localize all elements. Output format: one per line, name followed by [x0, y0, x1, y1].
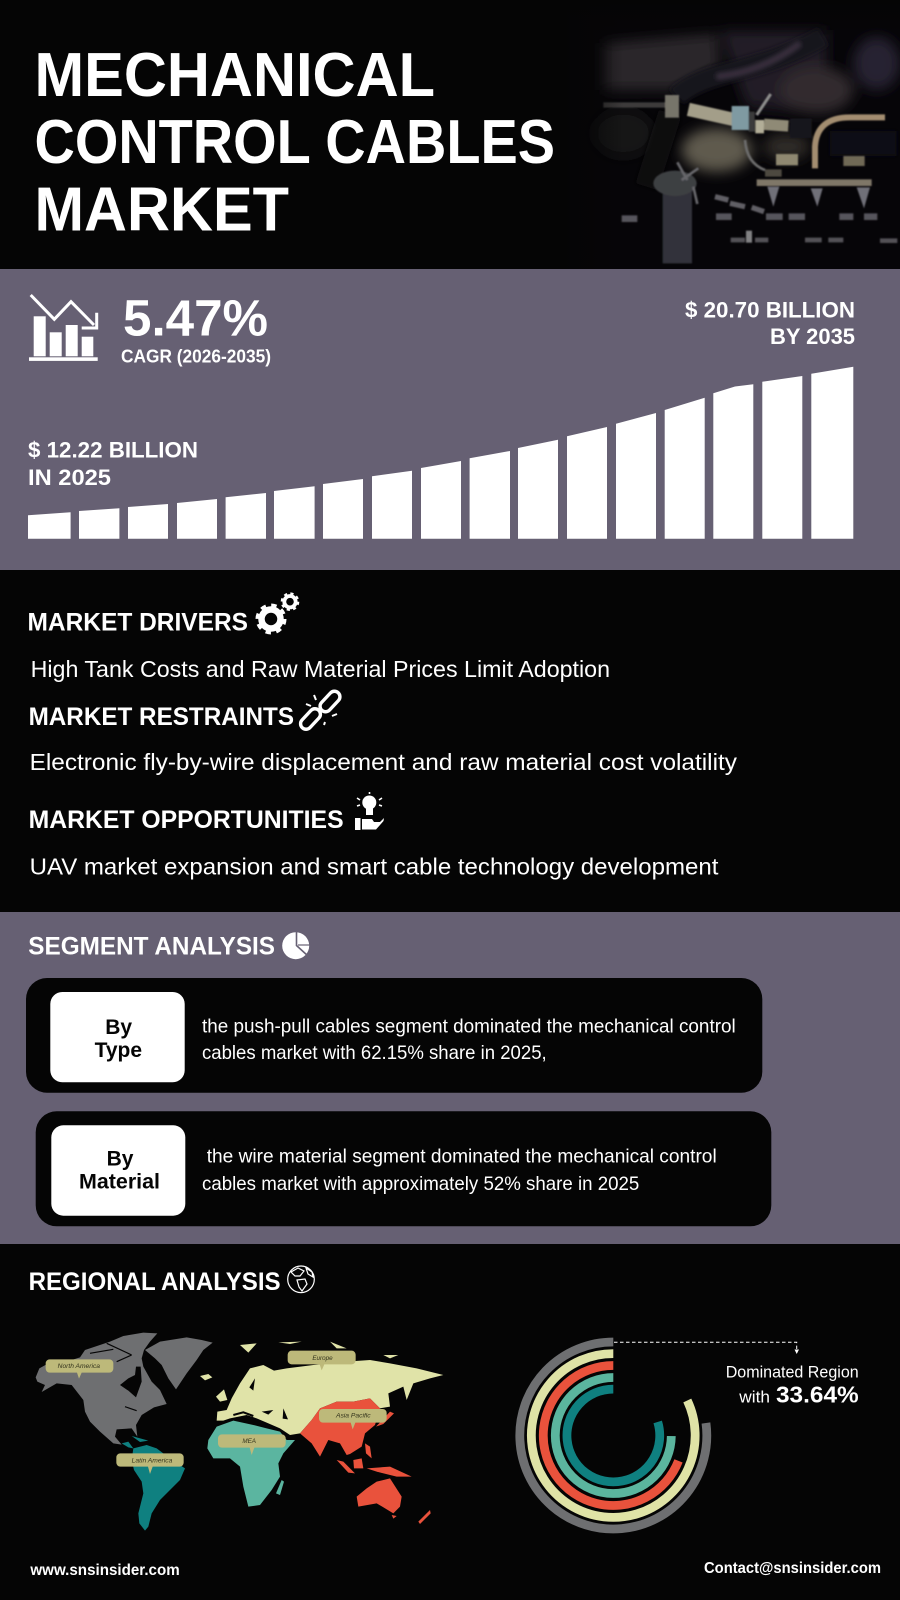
callout: dominated region	[726, 1363, 859, 1408]
title: MECHANICAL	[34, 41, 435, 110]
icon: chart with arrow	[29, 295, 98, 361]
region: middle east and africa	[207, 1421, 295, 1507]
footer	[29, 1560, 881, 1579]
bar chart: growth 2025 to 2035	[28, 367, 853, 539]
label: by type: By	[105, 1016, 132, 1039]
radial bar chart	[520, 1342, 707, 1529]
start value label: $ 12.22 BILLION	[28, 437, 198, 462]
callout: asia pacific: Asia Pacific	[335, 1413, 371, 1420]
header photo: mechanical cable	[560, 0, 900, 269]
heading: segment analysis: SEGMENT ANALYSIS	[28, 932, 275, 960]
callout: dominated region: 33.64%	[776, 1382, 859, 1408]
title: MARKET	[34, 176, 289, 244]
text: by material description: the wire material segment dominated the mechanical control	[207, 1146, 717, 1168]
end value label: $ 20.70 BILLION	[685, 297, 855, 322]
region: latin america	[122, 1436, 185, 1531]
text: by material description: cables market with approximately 52% share in 2025	[202, 1173, 639, 1195]
region: europe	[200, 1342, 443, 1435]
icon: pie chart	[282, 931, 310, 959]
panel: header	[0, 0, 900, 269]
contact email: Contact@snsinsider.com	[704, 1560, 881, 1577]
icon: hand with light bulb	[355, 792, 384, 830]
start value label: IN 2025	[28, 465, 111, 490]
callout: latin america: Latin America	[132, 1458, 173, 1465]
label: by type: Type	[95, 1039, 142, 1062]
callout: europe	[288, 1351, 356, 1370]
callout: north america	[46, 1359, 113, 1379]
panel: market size forecast	[0, 269, 900, 570]
callout: north america: North America	[58, 1363, 100, 1370]
panel: segment analysis	[0, 912, 900, 1244]
title: CONTROL CABLES	[34, 108, 555, 177]
heading: regional analysis: REGIONAL ANALYSIS	[29, 1268, 281, 1296]
callout: latin america	[116, 1453, 184, 1474]
text: by type description: the push-pull cables segment dominated the mechanical control	[202, 1015, 736, 1037]
icon: broken link	[298, 689, 342, 732]
text: by type description: cables market with 62.15% share in 2025,	[202, 1042, 547, 1064]
text: by material description	[202, 1146, 717, 1195]
card: by material	[36, 1111, 771, 1226]
region: north america	[36, 1333, 213, 1445]
end value label	[685, 297, 855, 349]
world map	[36, 1333, 443, 1531]
icon: gears	[258, 594, 298, 632]
callout: europe: Europe	[312, 1355, 333, 1362]
start value label	[28, 437, 198, 490]
label: by material: By	[107, 1148, 134, 1171]
callout: mea	[218, 1434, 286, 1455]
CAGR value: 5.47%	[123, 289, 268, 346]
heading: market drivers: MARKET DRIVERS	[28, 609, 248, 637]
heading: market opportunities: MARKET OPPORTUNITIES	[29, 806, 344, 834]
callout: dominated region: Dominated Region	[726, 1363, 859, 1381]
end value label: BY 2035	[770, 324, 855, 349]
label: by type	[50, 992, 185, 1082]
arrow: dashed leader line	[614, 1342, 799, 1354]
label: by material: Material	[79, 1170, 160, 1193]
callout: dominated region: with	[738, 1389, 770, 1407]
CAGR value: CAGR (2026-2035)	[121, 347, 271, 367]
region: asia pacific	[300, 1398, 431, 1524]
callout: mea: MEA	[242, 1438, 257, 1445]
panel: regional analysis	[29, 1266, 859, 1531]
card: by type	[26, 978, 762, 1093]
text: opportunity: UAV market expansion and smart cable technology development	[30, 854, 719, 880]
heading: market restraints: MARKET RESTRAINTS	[29, 703, 294, 731]
icon: globe	[288, 1266, 314, 1293]
title	[34, 41, 555, 244]
callout: asia pacific	[319, 1409, 387, 1429]
text: by type description	[202, 1015, 736, 1064]
label: by material	[51, 1125, 185, 1216]
website: www.snsinsider.com	[29, 1562, 180, 1579]
text: driver: High Tank Costs and Raw Material Prices Limit Adoption	[31, 656, 610, 682]
text: restraint: Electronic fly-by-wire displacement and raw material cost volatility	[30, 749, 738, 775]
panel: market dynamics	[28, 594, 738, 880]
